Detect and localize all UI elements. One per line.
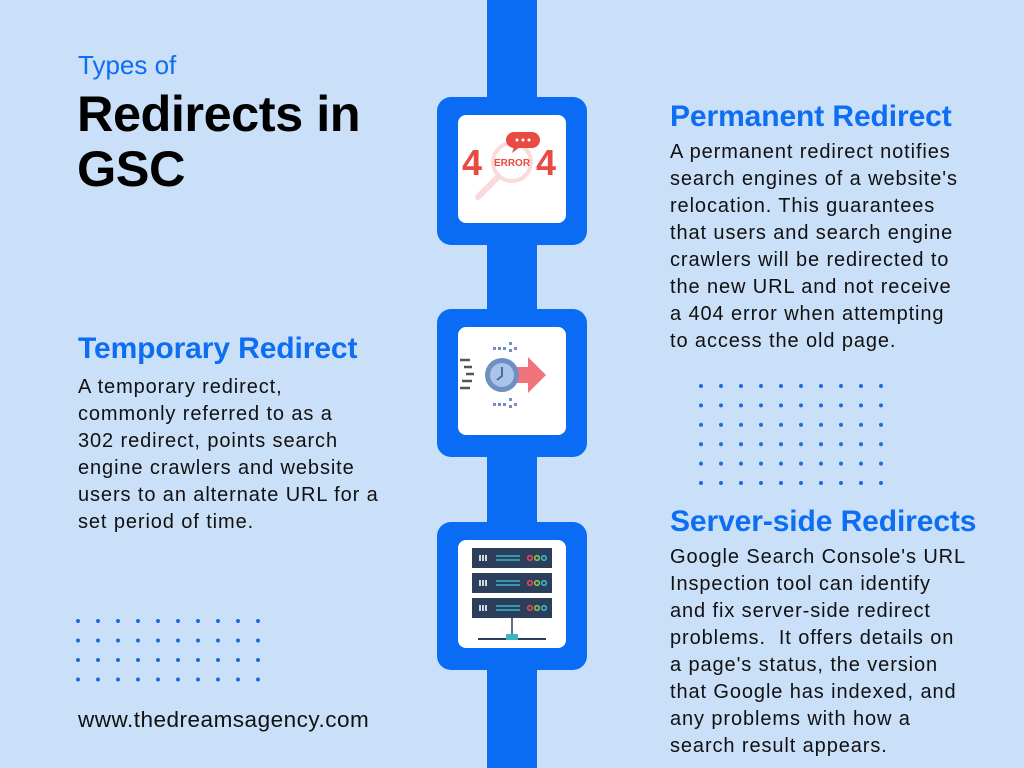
icon box: 404 error <box>437 97 587 245</box>
text: server-side: search result appears. <box>670 735 888 757</box>
dots left <box>76 619 260 682</box>
text: permanent: relocation. This guarantees <box>670 195 935 217</box>
title <box>77 85 360 197</box>
text: server-side: problems. It offers details on <box>670 627 954 649</box>
text: temporary: users to an alternate URL for a <box>78 484 379 506</box>
text: permanent: to access the old page. <box>670 330 896 352</box>
heading: temporary: Temporary Redirect <box>78 332 357 365</box>
icon box: clock redirect <box>437 309 587 457</box>
text: temporary: set period of time. <box>78 511 254 533</box>
text: temporary <box>78 376 379 533</box>
icon box: server <box>437 522 587 670</box>
website url: www.thedreamsagency.com <box>78 707 369 732</box>
spine <box>487 0 537 768</box>
text: server-side: that Google has indexed, and <box>670 681 957 703</box>
icon box: 404 error: 4 <box>462 142 482 183</box>
title: Redirects in <box>77 85 360 142</box>
subtitle: Types of <box>78 50 176 80</box>
dots right <box>699 384 883 485</box>
text: temporary: engine crawlers and website <box>78 457 355 479</box>
text: permanent: the new URL and not receive <box>670 276 952 298</box>
text: server-side: Inspection tool can identify <box>670 573 931 595</box>
text: server-side <box>670 546 966 757</box>
text: permanent <box>670 141 958 352</box>
text: permanent: that users and search engine <box>670 222 953 244</box>
heading: permanent: Permanent Redirect <box>670 100 952 133</box>
text: temporary: commonly referred to as a <box>78 403 333 425</box>
text: permanent: crawlers will be redirected to <box>670 249 949 271</box>
text: permanent: a 404 error when attempting <box>670 303 944 325</box>
text: permanent: search engines of a website's <box>670 168 958 190</box>
icon box: 404 error: 4 <box>536 142 556 183</box>
text: temporary: A temporary redirect, <box>78 376 283 398</box>
text: server-side: and fix server-side redirect <box>670 600 931 622</box>
text: server-side: a page's status, the version <box>670 654 938 676</box>
heading: server-side: Server-side Redirects <box>670 505 976 538</box>
text: server-side: Google Search Console's URL <box>670 546 966 568</box>
text: permanent: A permanent redirect notifies <box>670 141 951 163</box>
title: GSC <box>77 140 185 197</box>
icon box: 404 error: ERROR <box>494 158 531 169</box>
text: server-side: any problems with how a <box>670 708 911 730</box>
text: temporary: 302 redirect, points search <box>78 430 338 452</box>
